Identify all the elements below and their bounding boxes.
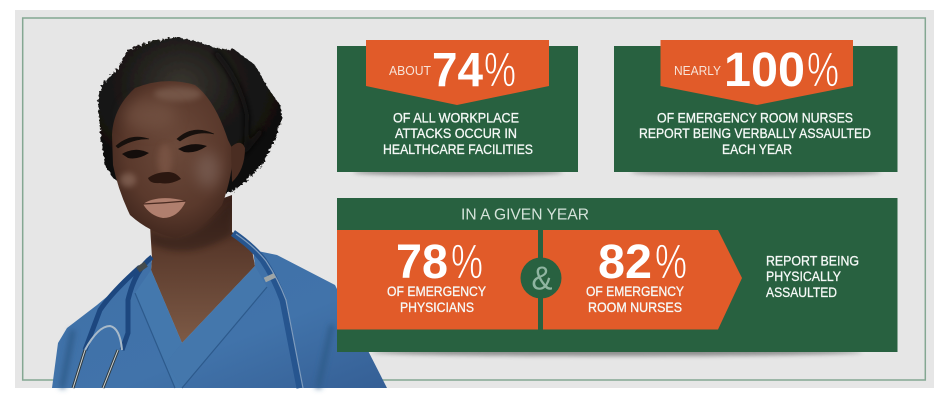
- ribbon: [366, 40, 549, 105]
- panel: about 74%: [337, 40, 578, 172]
- description: ATTACKS OCCUR IN: [395, 126, 517, 141]
- orange block: physicians: 78: [396, 236, 448, 289]
- ear: [231, 143, 245, 182]
- eyebrows: [116, 137, 149, 148]
- eyes: [122, 150, 149, 158]
- stat: 100: [724, 44, 805, 97]
- stat: ABOUT: [389, 63, 431, 78]
- lips: [143, 198, 186, 218]
- description: REPORT BEING VERBALLY ASSAULTED: [639, 126, 871, 141]
- description: [383, 110, 533, 157]
- stat: 74: [432, 44, 483, 98]
- description: PHYSICALLY: [766, 269, 841, 284]
- ribbon: [660, 40, 853, 105]
- ampersand badge: [520, 258, 562, 298]
- stat: [674, 44, 839, 97]
- orange arrow: nurses: ROOM NURSES: [588, 300, 682, 315]
- orange arrow: nurses: %: [655, 236, 687, 289]
- panel shadows: [353, 168, 881, 356]
- description: [639, 110, 871, 157]
- heading: IN A GIVEN YEAR: [461, 206, 589, 224]
- orange block: physicians: [337, 230, 538, 330]
- stat: %: [807, 44, 839, 97]
- neck and chest: [150, 195, 255, 343]
- stat: [389, 44, 516, 98]
- neck shadow: [150, 208, 233, 252]
- description: ASSAULTED: [766, 285, 837, 300]
- description: REPORT BEING: [766, 254, 859, 268]
- description: OF EMERGENCY ROOM NURSES: [657, 110, 853, 126]
- stethoscope: [73, 233, 303, 388]
- face: [112, 81, 245, 238]
- description: [766, 254, 859, 300]
- orange block: physicians: %: [451, 236, 483, 289]
- orange block: physicians: PHYSICIANS: [400, 300, 474, 315]
- orange arrow: nurses: 82: [598, 236, 652, 289]
- panel: nearly 100%: [614, 40, 898, 172]
- description: OF ALL WORKPLACE: [393, 110, 519, 126]
- hair: [98, 37, 282, 195]
- stat: %: [484, 44, 516, 97]
- panel: in a given year: [337, 198, 898, 352]
- ampersand badge: &: [532, 260, 552, 296]
- highlights: [154, 87, 202, 101]
- orange arrow: nurses: OF EMERGENCY: [586, 284, 684, 299]
- scrubs top: [52, 250, 387, 388]
- nose: [148, 172, 181, 184]
- orange block: physicians: OF EMERGENCY: [387, 284, 486, 299]
- stat: NEARLY: [674, 63, 721, 78]
- photo: nurse in blue scrubs: [52, 37, 387, 388]
- orange arrow: nurses: [543, 230, 742, 330]
- description: HEALTHCARE FACILITIES: [383, 142, 533, 157]
- description: EACH YEAR: [722, 142, 792, 157]
